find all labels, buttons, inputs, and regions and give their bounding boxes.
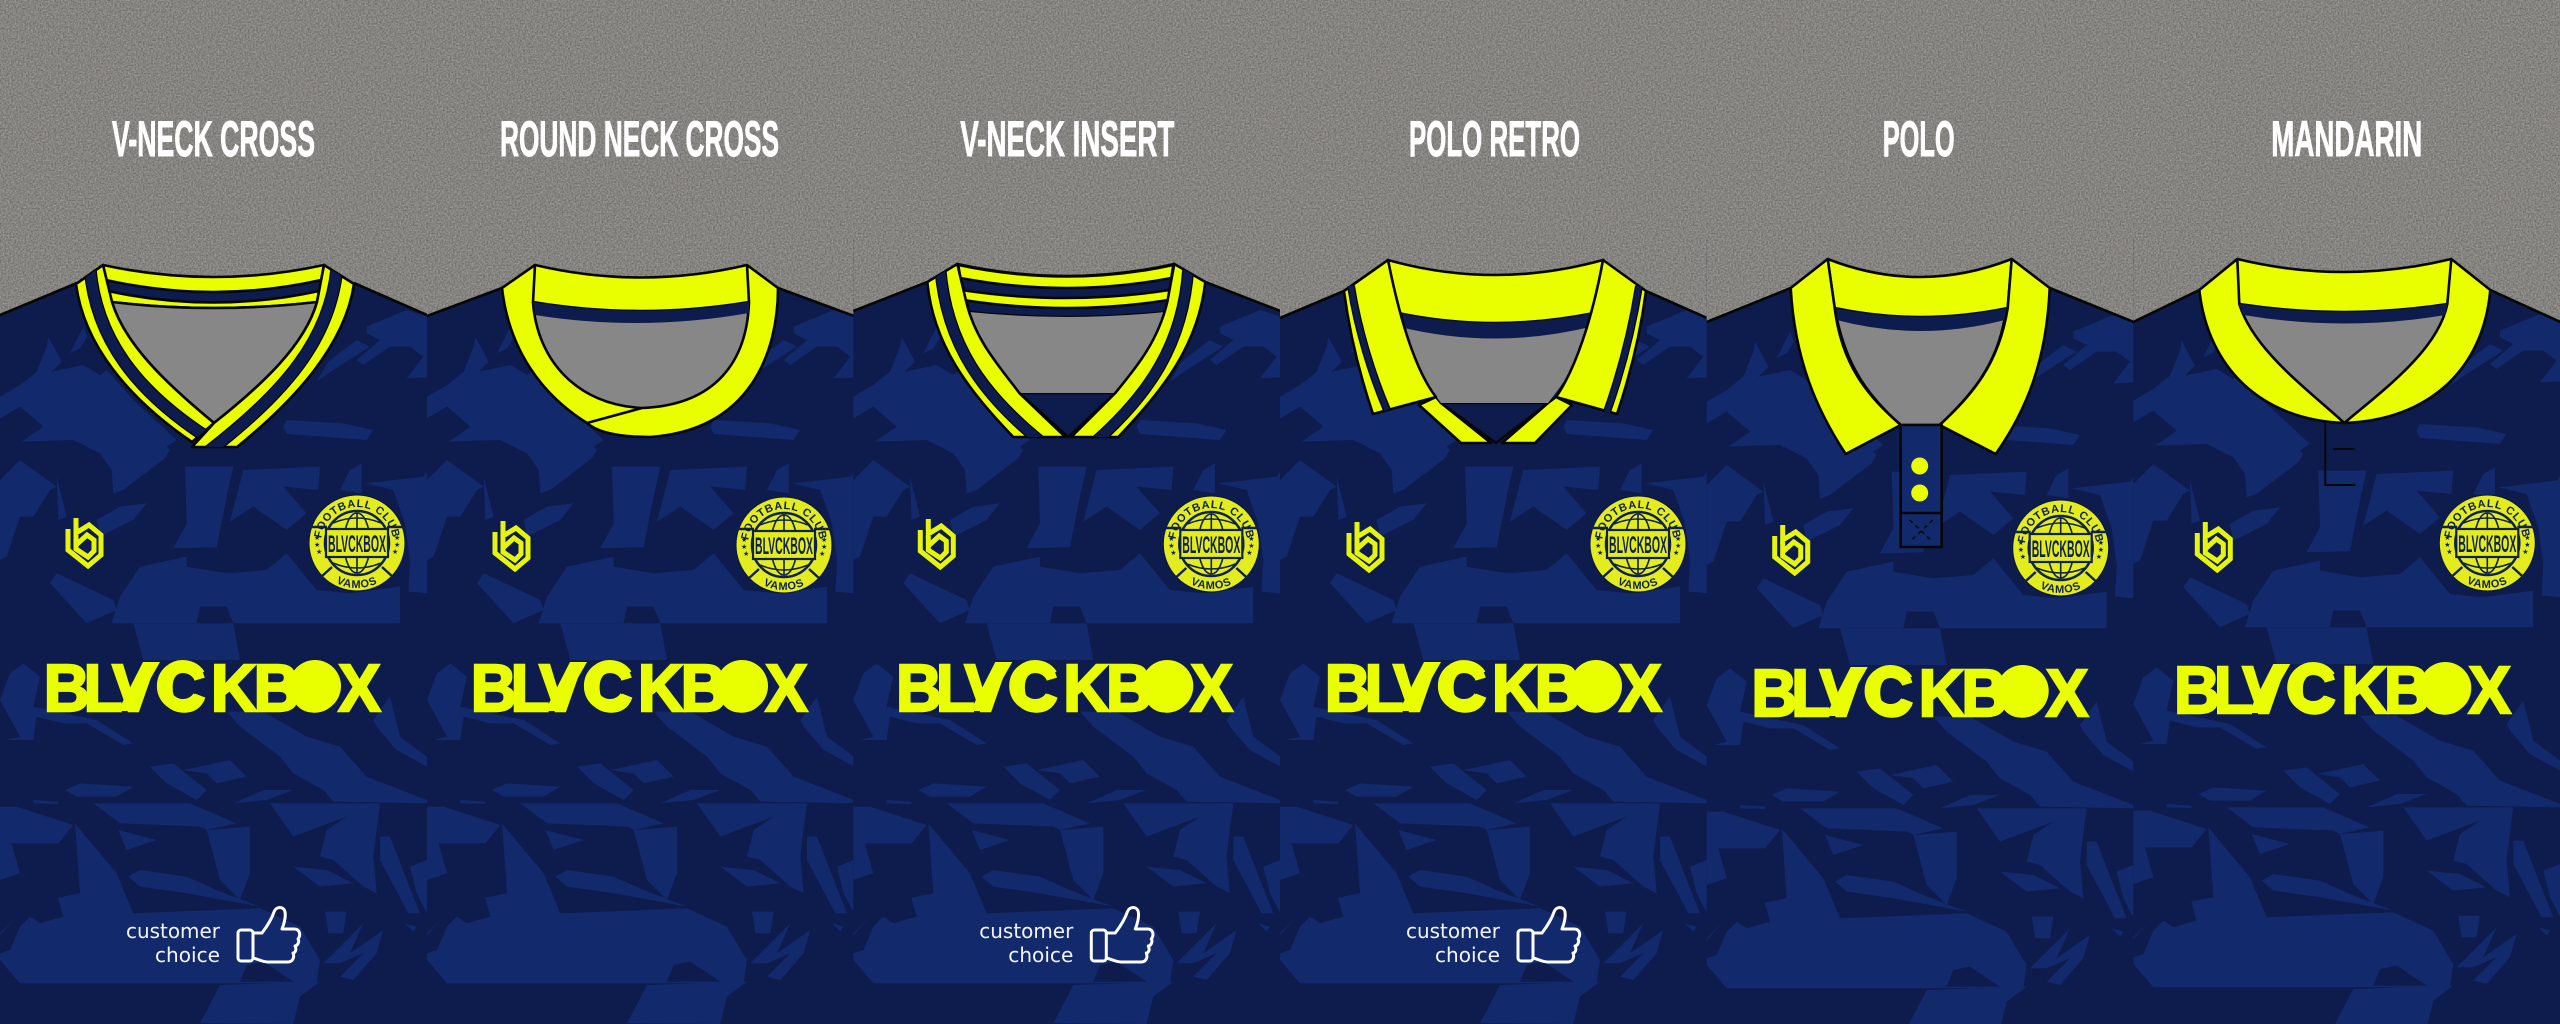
crest: football club badge: ★	[2444, 541, 2451, 549]
crest: football club badge: ★	[1597, 549, 1603, 557]
crest: football club badge: BLVCKBOX	[1182, 532, 1240, 559]
crest: football club badge: ★	[1248, 542, 1255, 550]
crest: football club badge: ★	[1675, 542, 1681, 550]
crest: football club badge: ★	[1673, 549, 1679, 557]
callout: customer choice: customer	[979, 919, 1074, 943]
collar: round neck cross	[502, 265, 778, 437]
crest: football club badge	[2439, 494, 2536, 592]
panel: round neck cross	[426, 0, 854, 1024]
callout: customer choice: customer	[126, 919, 221, 943]
wordmark: BLVCKBOX	[1751, 656, 2088, 730]
crest: football club badge	[308, 494, 406, 592]
callout: customer choice: choice	[1008, 943, 1073, 967]
crest: football club badge: ★	[2524, 534, 2531, 542]
placket with buttons	[1901, 425, 1942, 547]
wordmark: BLVCKBOX	[896, 651, 1233, 725]
crest: football club badge: VAMOS	[338, 576, 376, 588]
crest: football club badge: ★	[1170, 549, 1177, 557]
icon: brand mark	[2197, 522, 2230, 570]
crest: football club badge: VAMOS	[1620, 577, 1658, 589]
crest: football club badge: BLVCKBOX	[755, 533, 813, 560]
crest: football club badge: ★	[2444, 534, 2451, 542]
crest: football club badge: ★	[2020, 553, 2026, 561]
crest: football club badge: FOOTBALL CLUB	[2018, 504, 2104, 543]
callout: customer choice: customer	[1406, 919, 1501, 943]
crest: football club badge: ★	[741, 543, 747, 551]
icon: brand mark	[68, 518, 101, 566]
crest: football club badge: ★	[314, 541, 320, 549]
crest: football club badge: ★	[394, 534, 400, 542]
wordmark: BLVCKBOX	[1325, 651, 1662, 725]
wordmark: BLVCKBOX	[2174, 653, 2511, 727]
heading: V-neck insert: V-NECK INSERT	[960, 111, 1174, 167]
crest: football club badge: BLVCKBOX	[328, 531, 386, 558]
crest: football club badge: ★	[2018, 539, 2024, 547]
crest: football club badge	[736, 496, 832, 594]
crest: football club badge: BLVCKBOX	[2032, 536, 2090, 563]
crest: football club badge: ★	[2096, 553, 2102, 561]
heading: V-neck cross: V-NECK CROSS	[112, 111, 315, 167]
crest: football club badge: FOOTBALL CLUB	[314, 499, 400, 538]
heading: polo: POLO	[1883, 111, 1955, 167]
icon: brand mark	[495, 521, 528, 569]
crest: football club badge: ★	[819, 550, 825, 558]
icon: brand mark	[1775, 525, 1808, 573]
crest: football club badge: ★	[314, 534, 320, 542]
crest: football club badge: FOOTBALL CLUB	[1594, 500, 1680, 539]
heading: polo retro: POLO RETRO	[1409, 111, 1580, 167]
crest: football club badge: ★	[821, 536, 827, 544]
crest: football club badge: BLVCKBOX	[1609, 532, 1667, 559]
icon: brand mark	[1349, 522, 1382, 570]
collar: polo	[1791, 259, 2050, 454]
callout: customer choice: choice	[155, 943, 220, 967]
callout: customer choice	[979, 908, 1153, 967]
crest: football club badge: VAMOS	[766, 578, 804, 590]
crest: football club badge: ★	[1595, 535, 1601, 543]
crest: football club badge	[2012, 500, 2109, 596]
crest: football club badge: ★	[392, 548, 398, 556]
crest: football club badge: ★	[1248, 535, 1255, 543]
crest: football club badge: VAMOS	[1192, 577, 1230, 589]
callout: customer choice	[126, 908, 300, 967]
crest: football club badge: ★	[2522, 548, 2529, 556]
collar: mandarin	[2199, 259, 2490, 423]
panel: mandarin	[2133, 0, 2560, 1024]
crest: football club badge: ★	[2446, 548, 2453, 556]
crest: football club badge: FOOTBALL CLUB	[740, 501, 826, 540]
panel: V-neck cross	[0, 0, 427, 1024]
crest: football club badge: FOOTBALL CLUB	[1168, 500, 1254, 539]
collar: polo retro	[1344, 260, 1646, 443]
collar: V-neck cross	[76, 265, 354, 452]
crest: football club badge: ★	[821, 543, 827, 551]
panel: polo	[1706, 0, 2134, 1024]
crest: football club badge: ★	[2098, 539, 2104, 547]
wordmark: BLVCKBOX	[471, 651, 808, 725]
crest: football club badge: ★	[1595, 542, 1601, 550]
heading: mandarin: MANDARIN	[2271, 111, 2422, 167]
crest: football club badge: ★	[2098, 546, 2104, 554]
panel: polo retro	[1280, 0, 1707, 1024]
crest: football club badge: ★	[316, 548, 322, 556]
panel: V-neck insert	[852, 0, 1280, 1024]
crest: football club badge: ★	[1246, 549, 1253, 557]
callout: customer choice	[1406, 908, 1580, 967]
crest: football club badge: ★	[2018, 546, 2024, 554]
crest: football club badge: ★	[1675, 535, 1681, 543]
crest: football club badge: ★	[741, 536, 747, 544]
callout: customer choice: choice	[1435, 943, 1500, 967]
placket outline	[2325, 423, 2355, 485]
crest: football club badge: ★	[1168, 535, 1175, 543]
collar: V-neck insert	[927, 264, 1205, 442]
crest: football club badge: FOOTBALL CLUB	[2444, 499, 2530, 538]
icon: brand mark	[920, 519, 953, 567]
heading: round neck cross: ROUND NECK CROSS	[500, 111, 779, 167]
crest: football club badge: ★	[394, 541, 400, 549]
crest: football club badge	[1590, 496, 1686, 592]
crest: football club badge	[1163, 496, 1260, 592]
crest: football club badge: ★	[1168, 542, 1175, 550]
crest: football club badge: ★	[743, 550, 749, 558]
wordmark: BLVCKBOX	[44, 651, 381, 725]
crest: football club badge: ★	[2524, 541, 2531, 549]
crest: football club badge: VAMOS	[2042, 581, 2080, 593]
crest: football club badge: VAMOS	[2468, 576, 2506, 588]
